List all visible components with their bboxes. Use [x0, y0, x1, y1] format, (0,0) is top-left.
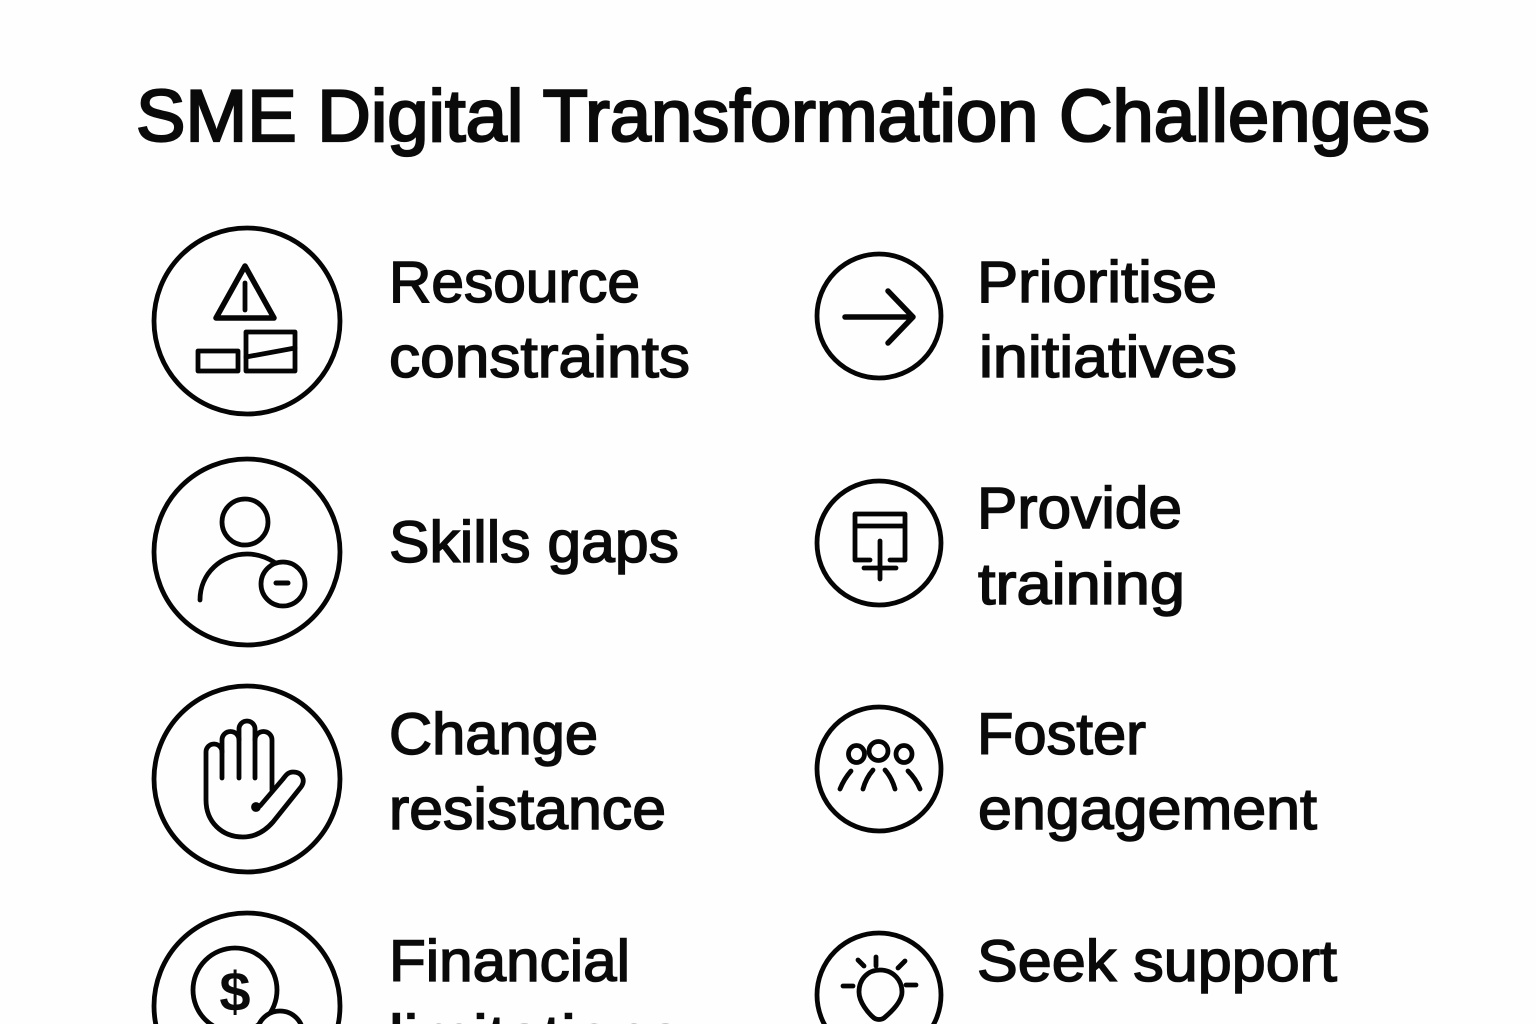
label: resource constraints: constraints [389, 325, 690, 390]
solution: foster engagement [817, 702, 1317, 842]
icon: dollar coins [154, 913, 340, 1024]
title: SME Digital Transformation Challenges [136, 76, 1430, 157]
solution: provide training [817, 476, 1185, 617]
challenge: financial limitations [154, 913, 682, 1024]
challenge: skills gaps [154, 459, 679, 645]
label: resource constraints: Resource [389, 250, 640, 315]
label: provide training: training [978, 552, 1185, 617]
label: skills gaps: Skills gaps [389, 510, 679, 575]
label: seek support: Seek support [977, 929, 1337, 994]
label: foster engagement: engagement [978, 777, 1317, 842]
icon: group of people [817, 707, 941, 831]
icon: dollar coins: $ [219, 960, 251, 1023]
solution: prioritise initiatives [817, 250, 1237, 390]
icon: person with minus [154, 459, 340, 645]
icon: presentation board [817, 481, 941, 605]
label: prioritise initiatives [977, 250, 1237, 390]
label: resource constraints [389, 250, 690, 390]
challenge: resource constraints [154, 228, 690, 414]
solution: seek support [817, 929, 1337, 1024]
icon: raised hand [154, 686, 340, 872]
label: provide training [977, 476, 1185, 617]
label: prioritise initiatives: Prioritise [977, 250, 1217, 315]
label: financial limitations [389, 929, 682, 1024]
label: change resistance [389, 702, 666, 842]
label: foster engagement [977, 702, 1317, 842]
label: financial limitations: Financial [389, 929, 630, 994]
challenge: change resistance [154, 686, 666, 872]
label: provide training: Provide [977, 476, 1182, 541]
label: change resistance: Change [389, 702, 598, 767]
label: foster engagement: Foster [977, 702, 1146, 767]
icon: warning triangle and blocks [154, 228, 340, 414]
icon: light bulb [817, 933, 941, 1024]
icon: arrow [817, 254, 941, 378]
label: prioritise initiatives: initiatives [979, 325, 1237, 390]
label: change resistance: resistance [389, 777, 666, 842]
